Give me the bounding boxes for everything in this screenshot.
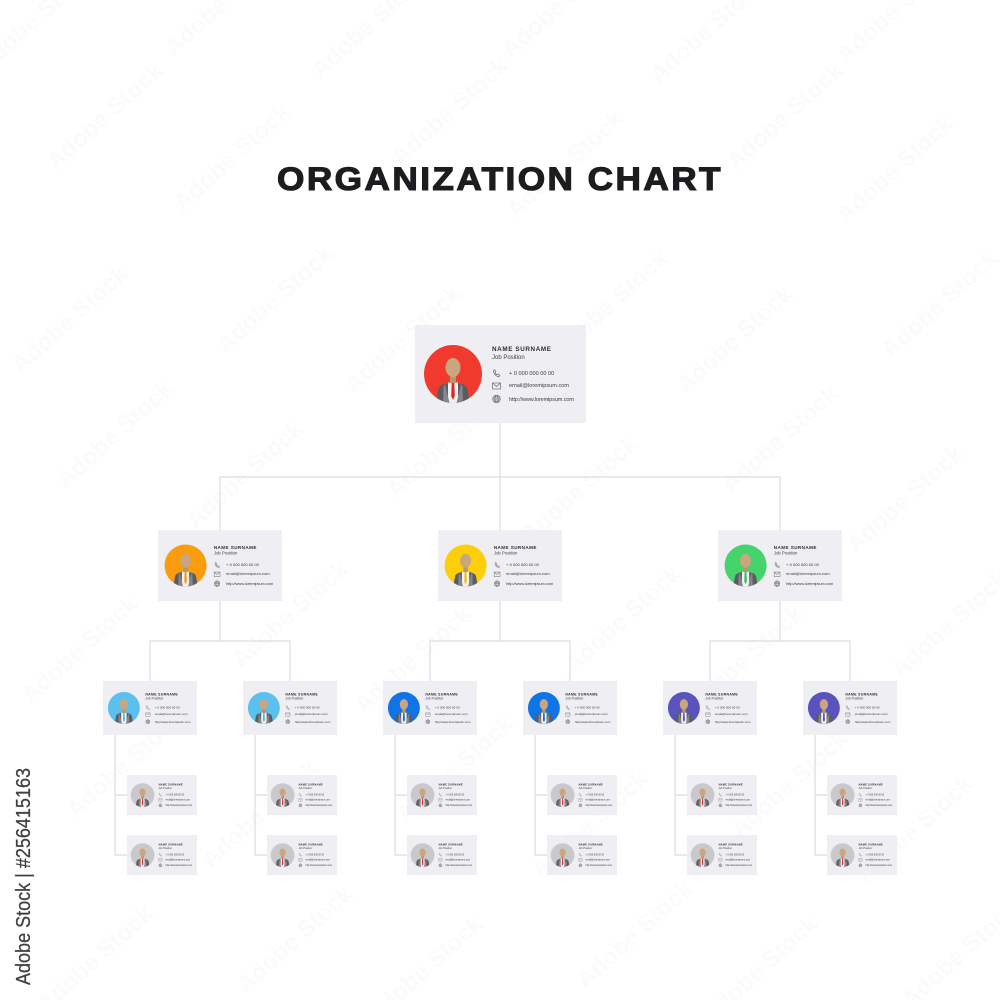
card: staff column 6 lower: Job Position [859, 847, 873, 850]
card: manager orange: email@loremipsum.com [226, 571, 270, 576]
card: manager orange [158, 530, 282, 601]
card: lead purple 1: Job Position [705, 697, 723, 701]
watermark pattern: Adobe Stock [876, 245, 1000, 364]
card: staff column 2 lower: email@loremipsum.com [306, 858, 330, 861]
watermark pattern: Adobe Stock [386, 52, 514, 171]
card: staff column 1 lower: + 0 000 000 00 00 [166, 855, 185, 857]
card: staff column 3 lower: Job Position [439, 847, 453, 850]
watermark pattern: Adobe Stock [6, 260, 134, 379]
card: staff column 5 lower: email@loremipsum.com [726, 858, 750, 861]
card: lead light blue 2: NAME SURNAME [285, 692, 318, 696]
card: lead purple 1: NAME SURNAME [705, 692, 738, 696]
card: staff column 6 lower: + 0 000 000 00 00 [866, 855, 885, 857]
card: staff column 1 lower: email@loremipsum.com [166, 858, 190, 861]
card: staff column 3 lower: http://www.loremipsum.com [446, 864, 472, 867]
card: staff column 2 upper: http://www.loremipsum.com [306, 804, 332, 807]
card: manager yellow: + 0 000 000 00 00 [506, 562, 540, 567]
watermark pattern: Adobe Stock [196, 755, 324, 874]
card: top executive: + 0 000 000 00 00 [509, 371, 554, 377]
card: staff column 4 lower: Job Position [579, 847, 593, 850]
card: staff column 1 lower: NAME SURNAME [159, 843, 183, 847]
watermark pattern: Adobe Stock [226, 555, 354, 674]
watermark pattern: Adobe Stock [726, 725, 854, 844]
card: staff column 5 upper: Job Position [719, 787, 733, 790]
card: staff column 3 lower [407, 835, 477, 875]
card: staff column 3 upper: email@loremipsum.com [446, 798, 470, 801]
card: lead light blue 2 [243, 681, 337, 735]
card: manager orange: http://www.loremipsum.com [226, 581, 274, 586]
card: lead light blue 2: http://www.loremipsum.com [295, 720, 331, 724]
watermark pattern: Adobe Stock [501, 105, 629, 224]
card: staff column 6 lower: NAME SURNAME [859, 843, 883, 847]
card: staff column 3 lower: email@loremipsum.com [446, 858, 470, 861]
card: lead purple 2: Job Position [845, 697, 863, 701]
card: manager orange: Job Position [214, 551, 238, 556]
card: staff column 6 lower: http://www.loremipsum.com [866, 864, 892, 867]
watermark pattern: Adobe Stock [546, 245, 674, 364]
card: staff column 2 lower: NAME SURNAME [299, 843, 323, 847]
card: lead purple 1 [663, 681, 757, 735]
watermark pattern: Adobe Stock [211, 240, 339, 359]
card: staff column 3 upper: Job Position [439, 787, 453, 790]
card: staff column 6 lower: email@loremipsum.com [866, 858, 890, 861]
card: staff column 3 upper: NAME SURNAME [439, 783, 463, 787]
card: staff column 4 lower: NAME SURNAME [579, 843, 603, 847]
watermark pattern: Adobe Stock [831, 110, 959, 229]
card: staff column 1 upper: http://www.loremipsum.com [166, 804, 192, 807]
watermark pattern: Adobe Stock [231, 880, 359, 999]
watermark pattern: Adobe Stock [16, 590, 144, 709]
watermark pattern: Adobe Stock [516, 430, 644, 549]
card: staff column 2 lower [267, 835, 337, 875]
card: staff column 4 lower [547, 835, 617, 875]
card: lead blue 1: email@loremipsum.com [435, 712, 468, 716]
card: manager yellow: email@loremipsum.com [506, 571, 550, 576]
card: staff column 4 lower: http://www.loremipsum.com [586, 864, 612, 867]
card: lead light blue 1: email@loremipsum.com [155, 712, 188, 716]
watermark pattern: Adobe Stock [716, 380, 844, 499]
card: lead blue 2: + 0 000 000 00 00 [575, 705, 600, 709]
watermark pattern: Adobe Stock [681, 600, 809, 719]
card: manager yellow: http://www.loremipsum.com [506, 581, 554, 586]
card: lead light blue 1: Job Position [145, 697, 163, 701]
watermark pattern: Adobe Stock [61, 705, 189, 824]
watermark pattern: Adobe Stock [51, 375, 179, 494]
card: top executive: NAME SURNAME [492, 346, 552, 353]
card: lead light blue 2: email@loremipsum.com [295, 712, 328, 716]
card: lead blue 1: NAME SURNAME [425, 692, 458, 696]
card: staff column 2 upper: email@loremipsum.com [306, 798, 330, 801]
card: staff column 4 lower: + 0 000 000 00 00 [586, 855, 605, 857]
card: manager green: NAME SURNAME [774, 545, 817, 550]
connector lines [115, 423, 850, 855]
watermark pattern: Adobe Stock [168, 98, 296, 217]
card: staff column 5 lower: http://www.loremipsum.com [726, 864, 752, 867]
card: lead blue 2: http://www.loremipsum.com [575, 720, 611, 724]
card: top executive: http://www.loremipsum.com [509, 397, 574, 403]
card: top executive: Job Position [492, 355, 525, 361]
watermark pattern: Adobe Stock [339, 280, 467, 399]
card: staff column 1 upper: Job Position [159, 787, 173, 790]
card: lead light blue 2: + 0 000 000 00 00 [295, 705, 320, 709]
card: manager orange: NAME SURNAME [214, 545, 257, 550]
card: staff column 6 upper: http://www.loremipsum.com [866, 804, 892, 807]
card: staff column 5 lower: Job Position [719, 847, 733, 850]
watermark pattern: Adobe Stock [41, 57, 169, 176]
card: lead purple 2 [803, 681, 897, 735]
card: staff column 1 lower: http://www.loremipsum.com [166, 864, 192, 867]
card: manager green: email@loremipsum.com [786, 571, 830, 576]
card: staff column 3 upper [407, 775, 477, 815]
card: staff column 5 lower: + 0 000 000 00 00 [726, 855, 745, 857]
card: top executive [415, 325, 586, 423]
watermark pattern: Adobe Stock [391, 710, 519, 829]
watermark pattern: Adobe Stock [381, 385, 509, 504]
card: lead purple 1: http://www.loremipsum.com [715, 720, 751, 724]
card: lead blue 1 [383, 681, 477, 735]
card: staff column 6 upper: Job Position [859, 787, 873, 790]
card: staff column 2 upper [267, 775, 337, 815]
card: staff column 1 upper: + 0 000 000 00 00 [166, 795, 185, 797]
card: manager green: + 0 000 000 00 00 [786, 562, 820, 567]
card: staff column 1 upper [127, 775, 197, 815]
card: staff column 5 upper [687, 775, 757, 815]
card: manager yellow: NAME SURNAME [494, 545, 537, 550]
watermark pattern: Adobe Stock [571, 875, 699, 994]
card: staff column 6 lower [827, 835, 897, 875]
watermark pattern: Adobe Stock [841, 440, 969, 559]
card: staff column 2 upper: Job Position [299, 787, 313, 790]
card: staff column 5 lower: NAME SURNAME [719, 843, 743, 847]
card: staff column 5 upper: + 0 000 000 00 00 [726, 795, 745, 797]
card: staff column 3 lower: NAME SURNAME [439, 843, 463, 847]
card: lead blue 1: http://www.loremipsum.com [435, 720, 471, 724]
card: staff column 2 lower: http://www.loremipsum.com [306, 864, 332, 867]
card: staff column 5 lower [687, 835, 757, 875]
card: staff column 2 lower: + 0 000 000 00 00 [306, 855, 325, 857]
card: staff column 5 upper: http://www.loremipsum.com [726, 804, 752, 807]
card: manager orange: + 0 000 000 00 00 [226, 562, 260, 567]
card: staff column 2 upper: NAME SURNAME [299, 783, 323, 787]
card: staff column 6 upper [827, 775, 897, 815]
card: staff column 2 lower: Job Position [299, 847, 313, 850]
card: lead purple 2: + 0 000 000 00 00 [855, 705, 880, 709]
card: lead light blue 1: NAME SURNAME [145, 692, 178, 696]
card: staff column 1 upper: email@loremipsum.com [166, 798, 190, 801]
card: lead blue 1: Job Position [425, 697, 443, 701]
card: lead purple 2: http://www.loremipsum.com [855, 720, 891, 724]
card: lead purple 2: email@loremipsum.com [855, 712, 888, 716]
card: lead purple 1: email@loremipsum.com [715, 712, 748, 716]
card: staff column 6 upper: NAME SURNAME [859, 783, 883, 787]
card: staff column 1 lower [127, 835, 197, 875]
card: lead blue 2: Job Position [565, 697, 583, 701]
watermark pattern: Adobe Stock [526, 765, 654, 884]
card: manager green: Job Position [774, 551, 798, 556]
watermark pattern: Adobe Stock [349, 600, 477, 719]
watermark pattern: Adobe Stock [181, 415, 309, 534]
watermark pattern: Adobe Stock [559, 560, 687, 679]
watermark pattern: Adobe Stock [851, 770, 979, 889]
title: ORGANIZATION CHART [277, 161, 723, 197]
card: lead purple 1: + 0 000 000 00 00 [715, 705, 740, 709]
card: staff column 1 lower: Job Position [159, 847, 173, 850]
card: lead light blue 1 [103, 681, 197, 735]
card: staff column 6 upper: email@loremipsum.com [866, 798, 890, 801]
card: lead blue 2: NAME SURNAME [565, 692, 598, 696]
card: staff column 4 upper: http://www.loremipsum.com [586, 804, 612, 807]
card: lead light blue 1: + 0 000 000 00 00 [155, 705, 180, 709]
card: staff column 3 upper: http://www.loremipsum.com [446, 804, 472, 807]
watermark pattern: Adobe Stock [671, 280, 799, 399]
card: staff column 4 upper [547, 775, 617, 815]
card: staff column 4 upper: NAME SURNAME [579, 783, 603, 787]
card: top executive: email@loremipsum.com [509, 383, 569, 389]
watermark pattern: Adobe Stock [721, 57, 849, 176]
card: staff column 4 lower: email@loremipsum.com [586, 858, 610, 861]
card: manager green: http://www.loremipsum.com [786, 581, 834, 586]
card: lead purple 2: NAME SURNAME [845, 692, 878, 696]
card: staff column 3 lower: + 0 000 000 00 00 [446, 855, 465, 857]
card: staff column 4 upper: + 0 000 000 00 00 [586, 795, 605, 797]
stock image credit: Adobe Stock | #256415163 [13, 768, 35, 985]
card: lead light blue 1: http://www.loremipsum.com [155, 720, 191, 724]
card: lead light blue 2: Job Position [285, 697, 303, 701]
card: manager yellow: Job Position [494, 551, 518, 556]
card: staff column 5 upper: email@loremipsum.com [726, 798, 750, 801]
card: staff column 4 upper: email@loremipsum.com [586, 798, 610, 801]
card: staff column 2 upper: + 0 000 000 00 00 [306, 795, 325, 797]
card: manager green [718, 530, 842, 601]
card: lead blue 2 [523, 681, 617, 735]
card: staff column 6 upper: + 0 000 000 00 00 [866, 795, 885, 797]
card: lead blue 1: + 0 000 000 00 00 [435, 705, 460, 709]
card: lead blue 2: email@loremipsum.com [575, 712, 608, 716]
card: staff column 1 upper: NAME SURNAME [159, 783, 183, 787]
card: staff column 3 upper: + 0 000 000 00 00 [446, 795, 465, 797]
card: manager yellow [438, 530, 562, 601]
card: staff column 5 upper: NAME SURNAME [719, 783, 743, 787]
card: staff column 4 upper: Job Position [579, 787, 593, 790]
